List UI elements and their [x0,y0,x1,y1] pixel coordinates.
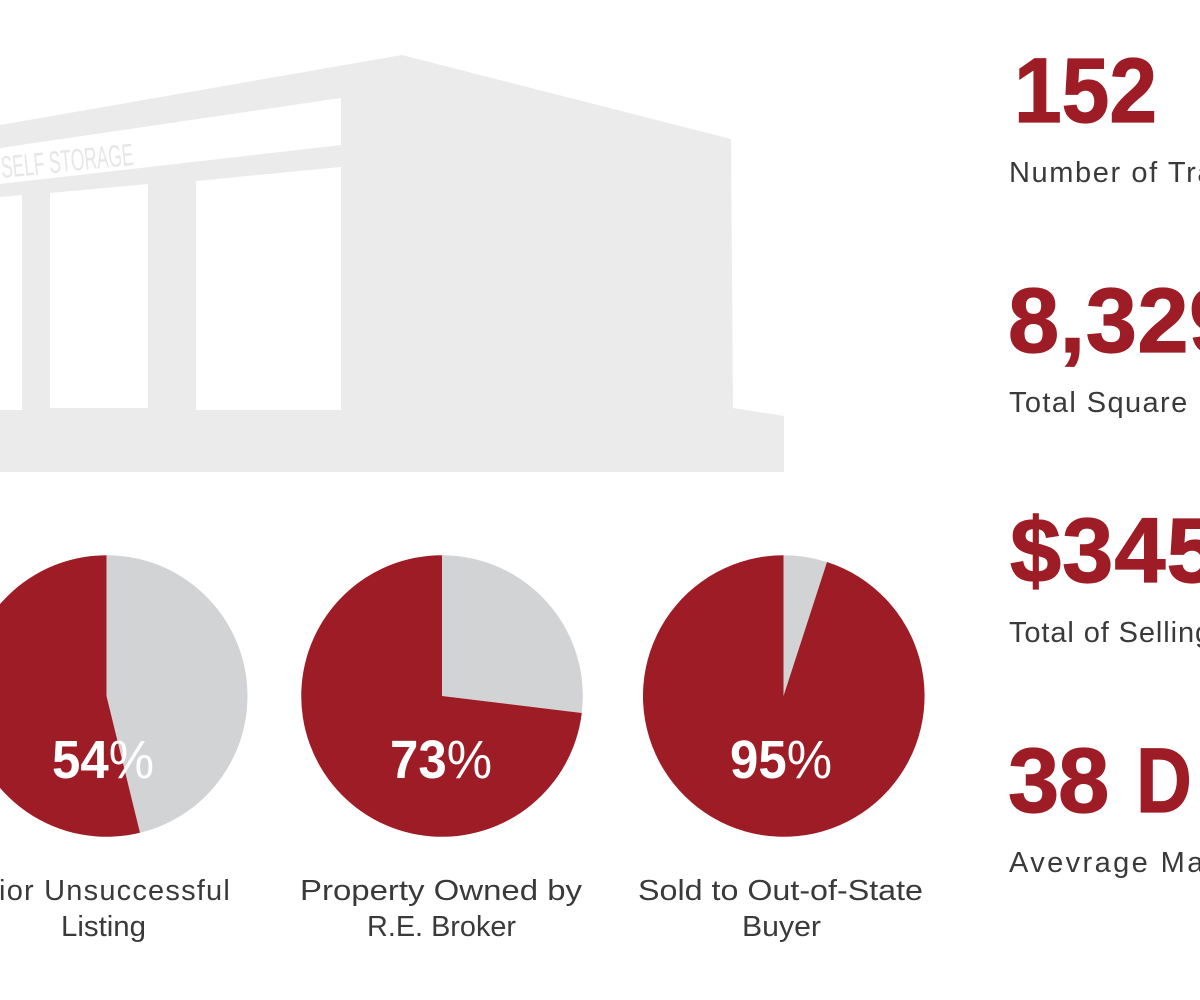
pie label line 2: R.E. Broker [367,911,516,943]
panel: stat marketing time [1008,730,1200,879]
panel: stat selling prices [1009,500,1200,649]
pie label line 2: Listing [61,911,146,943]
pie label: Property Owned by [300,875,583,907]
panel: stat square feet [1008,270,1200,419]
pie gray slice [442,555,583,713]
panel: stat transactions [1009,40,1200,189]
stat number: 152 [1014,40,1157,142]
sign band [0,98,341,184]
pie label: Sold to Out-of-State [638,875,923,907]
pie gray slice [784,555,827,696]
value 73%: 73% [390,730,492,790]
middle window [50,184,148,408]
panel: pie property owned by broker [300,555,583,943]
pie gray slice [106,555,247,833]
panel: pie prior unsuccessful listing [0,555,247,943]
panel: pie sold to out-of-state buyer [638,555,925,943]
pie red slice [301,555,582,837]
pie label line 2: Buyer [742,911,821,943]
stat number: 38 [1008,730,1108,832]
icon: self storage building [0,55,784,472]
value 54%: 54% [52,730,154,790]
left window [0,195,22,410]
pie red slice [0,555,140,837]
sign text: SELF STORAGE [0,137,135,185]
building silhouette [0,55,784,472]
pie red slice [643,555,925,837]
right window [196,167,341,410]
value 95%: 95% [730,730,832,790]
